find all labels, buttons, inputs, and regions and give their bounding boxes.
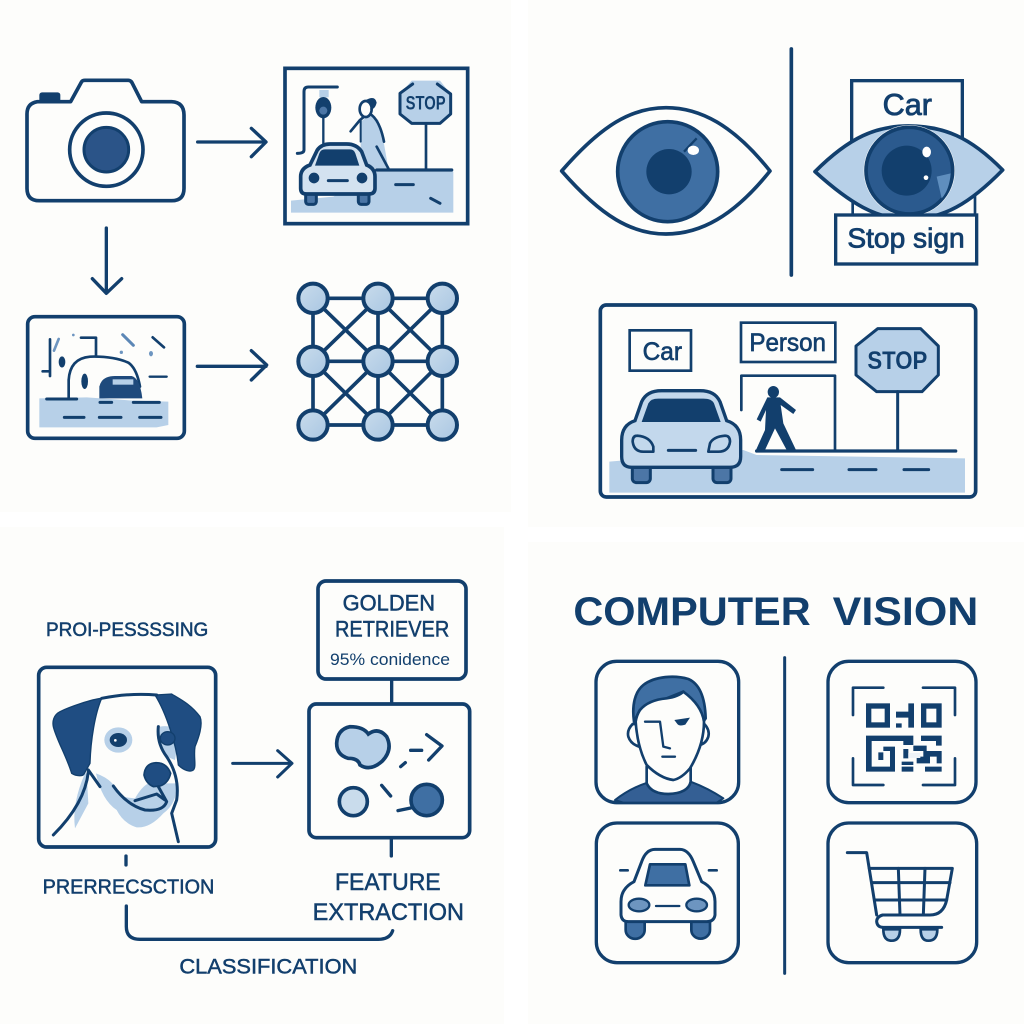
connector: bracket to classification xyxy=(126,906,393,939)
panel: image capture pipeline xyxy=(27,68,468,440)
result box: golden retriever xyxy=(318,581,466,679)
label: Car: Car xyxy=(883,88,932,122)
icon: human eye xyxy=(562,108,770,234)
small car silhouette xyxy=(99,376,142,398)
connector: result to features xyxy=(387,680,397,703)
pedestrian figure xyxy=(756,386,796,450)
label: Person: Person xyxy=(749,329,826,357)
icon: car xyxy=(596,823,738,963)
divider line xyxy=(780,658,789,973)
annotated street scene xyxy=(600,305,976,497)
processed image xyxy=(28,317,184,438)
dog photo box xyxy=(39,667,216,847)
pedestrian xyxy=(351,98,388,168)
machine eye with labels xyxy=(815,81,1003,264)
arrow: camera down to processed image xyxy=(92,228,122,293)
panel: computer vision applications xyxy=(573,590,978,973)
arrow: photo to features xyxy=(233,751,292,777)
icon: camera xyxy=(27,80,184,201)
title: COMPUTER xyxy=(573,590,811,634)
label: feature extraction: EXTRACTION xyxy=(313,899,464,926)
stop sign xyxy=(856,329,938,450)
stop sign: STOP xyxy=(406,94,446,115)
result box: golden retriever: GOLDEN xyxy=(343,591,435,616)
divider line xyxy=(786,49,797,275)
feature extraction box xyxy=(309,704,470,838)
label: Stop sign xyxy=(836,215,977,264)
label: Car xyxy=(630,330,691,371)
connector tick xyxy=(386,839,396,856)
title xyxy=(573,590,978,634)
connector tick xyxy=(121,856,131,865)
label: feature extraction: FEATURE xyxy=(335,869,441,896)
title: VISION xyxy=(833,590,978,634)
label: Car xyxy=(852,81,962,144)
car xyxy=(622,391,741,483)
label: Person xyxy=(741,323,835,362)
panel: human and machine eye xyxy=(562,49,1003,497)
label: feature extraction xyxy=(313,869,464,926)
label: classification: CLASSIFICATION xyxy=(179,954,357,978)
neural network grid xyxy=(298,284,457,440)
result box: golden retriever: RETRIEVER xyxy=(335,617,449,642)
street scene photo xyxy=(285,68,468,224)
icon: face recognition xyxy=(596,661,739,803)
result box: golden retriever: 95% conidence xyxy=(330,650,450,669)
icon: machine eye xyxy=(815,125,1003,219)
label: prediction: PRERRECSCTION xyxy=(43,876,214,898)
icon: QR code scan xyxy=(828,661,976,803)
stop sign: STOP xyxy=(867,347,927,375)
label: Car: Car xyxy=(643,338,683,366)
label: pre-processing: PROI-PESSSSING xyxy=(46,620,208,641)
arrow: camera to scene xyxy=(198,128,266,157)
car xyxy=(301,144,375,204)
label: Stop sign: Stop sign xyxy=(847,222,965,253)
arrow: processed image to network xyxy=(197,351,267,380)
panel: classification pipeline xyxy=(39,581,470,978)
icon: shopping cart xyxy=(828,823,977,963)
stop sign xyxy=(400,81,451,168)
